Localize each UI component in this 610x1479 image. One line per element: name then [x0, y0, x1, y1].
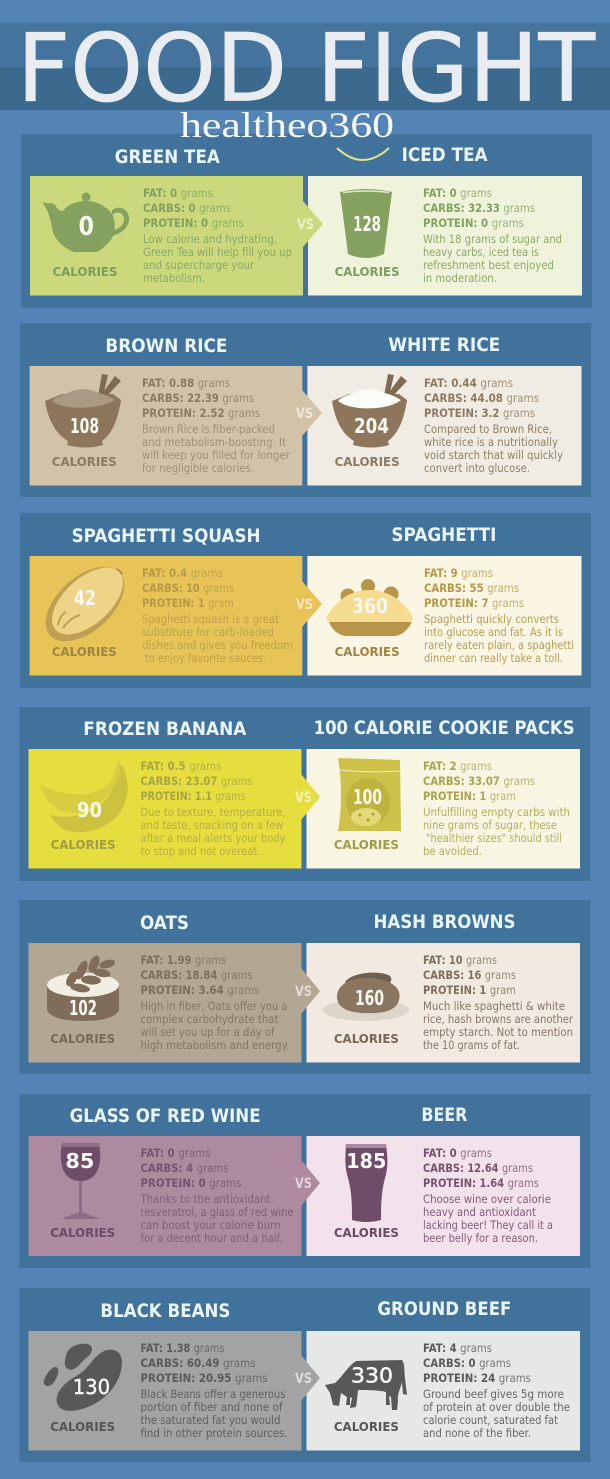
icon: beer glass: [345, 1144, 387, 1222]
calories label: CALORIES: [51, 837, 116, 852]
nutrition stats: FAT: 10 grams: [423, 953, 497, 967]
nutrition stats: PROTEIN: 0 grams: [140, 1176, 241, 1190]
card: oats: [28, 943, 302, 1062]
calories label: CALORIES: [50, 1225, 115, 1240]
description: the saturated fat you would: [140, 1413, 280, 1427]
description: Compared to Brown Rice,: [424, 422, 552, 436]
icon: wine glass: [61, 1143, 100, 1219]
description: metabolism.: [143, 271, 205, 285]
card: brown rice: [30, 366, 302, 486]
vs arrow: VS: [295, 790, 312, 806]
heading: 100 calorie cookie packs: 100 CALORIE COOKIE PACKS: [314, 717, 575, 739]
calories label: CALORIES: [334, 1419, 399, 1434]
nutrition stats: FAT: 0 grams: [143, 186, 213, 200]
description: [142, 422, 290, 475]
vs arrow: [295, 774, 320, 820]
nutrition stats: PROTEIN: 0 grams: [143, 216, 244, 230]
description: [423, 805, 570, 858]
icon: cow: 330: [351, 1364, 393, 1388]
nutrition stats: PROTEIN: 3.2 grams: [424, 406, 535, 420]
description: refreshment best enjoyed: [423, 258, 554, 272]
description: Green Tea will help fill you up: [143, 245, 292, 259]
nutrition stats: CARBS: 23.07 grams: [140, 774, 252, 788]
nutrition stats: [423, 1341, 531, 1385]
vs arrow: VS: [295, 1371, 312, 1387]
nutrition stats: CARBS: 55 grams: [424, 581, 519, 595]
nutrition stats: CARBS: 22.39 grams: [142, 391, 254, 405]
description: [140, 999, 290, 1052]
icon: cookie pack: 100: [353, 785, 382, 809]
icon: cup: [340, 189, 392, 258]
nutrition stats: [143, 186, 244, 230]
card: white rice: [307, 366, 582, 486]
description: high metabolism and energy.: [140, 1038, 290, 1052]
description: resveratrol, a glass of red wine: [140, 1205, 294, 1219]
icon: cup: 128: [353, 212, 381, 236]
vs arrow: [295, 968, 320, 1014]
nutrition stats: FAT: 9 grams: [424, 566, 493, 580]
nutrition stats: FAT: 0.5 grams: [140, 759, 222, 773]
description: [424, 612, 574, 665]
description: [140, 1192, 294, 1245]
description: rice, hash browns are another: [423, 1012, 573, 1026]
heading: ground beef: GROUND BEEF: [377, 1298, 511, 1320]
icon: brown rice bowl: 108: [70, 414, 99, 438]
nutrition stats: [423, 953, 516, 997]
nutrition stats: PROTEIN: 1.64 grams: [423, 1176, 539, 1190]
icon: black beans: [44, 1344, 122, 1411]
card: spaghetti squash: [30, 552, 302, 676]
nutrition stats: CARBS: 60.49 grams: [140, 1356, 256, 1370]
description: of protein at over double the: [423, 1400, 570, 1414]
vs arrow: [296, 581, 322, 627]
card: cookie packs: [306, 749, 580, 868]
nutrition stats: [423, 1146, 539, 1190]
nutrition stats: PROTEIN: 1 gram: [423, 789, 516, 803]
calories label: CALORIES: [335, 644, 400, 659]
nutrition stats: FAT: 0.88 grams: [142, 376, 230, 390]
icon: white rice bowl: 204: [354, 414, 389, 438]
nutrition stats: CARBS: 10 grams: [142, 581, 234, 595]
icon: hash browns: 160: [355, 986, 384, 1010]
description: [423, 1387, 570, 1440]
vs arrow: [295, 1355, 320, 1401]
nutrition stats: FAT: 0 grams: [423, 186, 492, 200]
description: Much like spaghetti & white: [423, 999, 565, 1013]
description: Due to texture, temperature,: [140, 805, 286, 819]
calories label: CALORIES: [334, 1225, 399, 1240]
calories label: CALORIES: [335, 264, 400, 279]
icon: squash: [32, 552, 138, 656]
nutrition stats: CARBS: 32.33 grams: [423, 201, 535, 215]
nutrition stats: PROTEIN: 3.64 grams: [140, 983, 260, 997]
calories label: CALORIES: [50, 1031, 115, 1046]
nutrition stats: FAT: 1.38 grams: [140, 1341, 224, 1355]
description: find in other protein sources.: [140, 1426, 288, 1440]
nutrition stats: FAT: 4 grams: [423, 1341, 492, 1355]
vs arrow: VS: [295, 984, 312, 1000]
icon: black beans: 130: [73, 1375, 110, 1399]
nutrition stats: [142, 376, 260, 420]
panel: black beans vs ground beef: [20, 1288, 590, 1462]
icon: cookie pack: [338, 758, 401, 831]
description: the 10 grams of fat.: [423, 1038, 520, 1052]
heading: green tea: GREEN TEA: [115, 146, 220, 168]
description: empty starch. Not to mention: [423, 1025, 573, 1039]
description: calorie count, saturated fat: [423, 1413, 558, 1427]
nutrition stats: PROTEIN: 20.95 grams: [140, 1371, 268, 1385]
vs arrow: [297, 201, 323, 247]
card: spaghetti: [307, 556, 582, 676]
calories label: CALORIES: [50, 1419, 115, 1434]
card: iced tea: [308, 176, 582, 296]
calories label: CALORIES: [52, 644, 117, 659]
heading: spaghetti: SPAGHETTI: [391, 524, 496, 546]
icon: banana: [40, 757, 128, 832]
panel: spaghetti squash vs spaghetti: [20, 513, 591, 688]
heading: glass of red wine: GLASS OF RED WINE: [70, 1105, 261, 1127]
nutrition stats: [140, 953, 260, 997]
description: to stop and not overeat.: [140, 844, 260, 858]
description: [423, 999, 573, 1052]
calories label: CALORIES: [334, 837, 399, 852]
description: [140, 1387, 288, 1440]
description: in moderation.: [423, 271, 497, 285]
panel: frozen banana vs cookie packs: [20, 707, 590, 881]
icon: cow: [325, 1360, 407, 1410]
heading: hash browns: HASH BROWNS: [374, 911, 516, 933]
description: [424, 422, 563, 475]
nutrition stats: [142, 566, 234, 610]
description: [143, 232, 292, 285]
nutrition stats: CARBS: 33.07 grams: [423, 774, 535, 788]
description: [140, 805, 286, 858]
panel: red wine vs beer: [20, 1094, 590, 1268]
nutrition stats: [140, 1146, 241, 1190]
nutrition stats: FAT: 2 grams: [423, 759, 492, 773]
card: hash browns: [306, 943, 580, 1062]
heading: frozen banana: FROZEN BANANA: [83, 718, 247, 740]
heading: oats: OATS: [140, 912, 189, 934]
description: for negligible calories.: [142, 461, 254, 475]
description: dishes and gives you freedom: [142, 638, 293, 652]
heading: iced tea: ICED TEA: [402, 144, 488, 166]
vs arrow: VS: [296, 597, 313, 613]
description: and none of the fiber.: [423, 1426, 531, 1440]
nutrition stats: [140, 1341, 268, 1385]
nutrition stats: [423, 759, 535, 803]
description: will set you up for a day of: [140, 1025, 275, 1039]
nutrition stats: FAT: 0 grams: [423, 1146, 492, 1160]
description: and metabolism-boosting. It: [142, 435, 286, 449]
description: heavy and antioxidant: [423, 1205, 536, 1219]
icon: white rice bowl: [332, 374, 407, 448]
description: "healthier sizes" should still: [426, 831, 562, 845]
heading: brown rice: BROWN RICE: [105, 335, 227, 357]
description: substitute for carb-loaded: [142, 625, 274, 639]
logo: healtheo360: [180, 105, 394, 160]
description: can boost your calorie burn: [140, 1218, 280, 1232]
nutrition stats: CARBS: 12.64 grams: [423, 1161, 533, 1175]
card: ground beef: [306, 1331, 580, 1450]
description: Thanks to the antioxidant: [140, 1192, 271, 1206]
icon: brown rice bowl: [45, 374, 121, 448]
nutrition stats: PROTEIN: 2.52 grams: [142, 406, 260, 420]
calories label: CALORIES: [334, 1031, 399, 1046]
description: for a decent hour and a half.: [140, 1231, 282, 1245]
description: High in fiber, Oats offer you a: [140, 999, 288, 1013]
icon: teapot: [42, 192, 129, 252]
description: Unfulfilling empty carbs with: [423, 805, 570, 819]
nutrition stats: PROTEIN: 24 grams: [423, 1371, 531, 1385]
nutrition stats: FAT: 0.4 grams: [142, 566, 223, 580]
icon: teapot: 0: [78, 212, 94, 242]
nutrition stats: [423, 186, 535, 230]
description: beer belly for a reason.: [423, 1231, 538, 1245]
icon: banana: 90: [77, 798, 102, 822]
description: Spaghetti squash is a great: [142, 612, 279, 626]
icon: oats can: [47, 954, 119, 1021]
description: Spaghetti quickly converts: [424, 612, 559, 626]
description: With 18 grams of sugar and: [423, 232, 562, 246]
vs arrow: VS: [297, 217, 314, 233]
icon: hash browns: [323, 973, 409, 1021]
panel: oats vs hash browns: [20, 900, 590, 1074]
heading: white rice: WHITE RICE: [388, 334, 500, 356]
description: [423, 1192, 553, 1245]
description: portion of fiber and none of: [140, 1400, 283, 1414]
vs arrow: VS: [295, 1176, 312, 1192]
description: white rice is a nutritionally: [424, 435, 558, 449]
logo: healtheo360: healtheo360: [180, 105, 394, 145]
description: nine grams of sugar, these: [423, 818, 557, 832]
nutrition stats: CARBS: 0 grams: [423, 1356, 511, 1370]
description: convert into glucose.: [424, 461, 530, 475]
nutrition stats: CARBS: 18.84 grams: [140, 968, 252, 982]
nutrition stats: CARBS: 0 grams: [143, 201, 231, 215]
description: Black Beans offer a generous: [140, 1387, 286, 1401]
description: be avoided.: [423, 844, 482, 858]
title banner: FOOD FIGHT: [17, 14, 596, 124]
description: heavy carbs, iced tea is: [423, 245, 539, 259]
description: lacking beer! They call it a: [423, 1218, 553, 1232]
nutrition stats: [424, 566, 524, 610]
nutrition stats: CARBS: 4 grams: [140, 1161, 228, 1175]
description: and taste, snacking on a few: [140, 818, 284, 832]
calories label: CALORIES: [52, 264, 118, 279]
heading: spaghetti squash: SPAGHETTI SQUASH: [72, 525, 261, 547]
description: rarely eaten plain, a spaghetti: [424, 638, 574, 652]
description: will keep you filled for longer: [142, 448, 290, 462]
card: black beans: [28, 1331, 302, 1450]
card: green tea: [30, 176, 303, 296]
heading: black beans: BLACK BEANS: [100, 1300, 230, 1322]
panel: green tea vs iced tea: [21, 134, 592, 308]
description: Ground beef gives 5g more: [423, 1387, 564, 1401]
description: into glucose and fat. As it is: [424, 625, 563, 639]
nutrition stats: CARBS: 16 grams: [423, 968, 516, 982]
nutrition stats: PROTEIN: 0 grams: [423, 216, 524, 230]
description: [423, 232, 562, 285]
description: Choose wine over calorie: [423, 1192, 551, 1206]
nutrition stats: [140, 759, 252, 803]
heading: beer: BEER: [421, 1104, 468, 1126]
description: void starch that will quickly: [424, 448, 563, 462]
vs arrow: VS: [296, 406, 313, 422]
nutrition stats: PROTEIN: 7 grams: [424, 596, 524, 610]
vs arrow: [296, 390, 322, 436]
nutrition stats: FAT: 0 grams: [140, 1146, 210, 1160]
vs arrow: [295, 1160, 320, 1206]
nutrition stats: PROTEIN: 1 gram: [142, 596, 234, 610]
icon: beer glass: 185: [346, 1149, 386, 1173]
description: [142, 612, 293, 665]
description: Low calorie and hydrating,: [143, 232, 277, 246]
nutrition stats: PROTEIN: 1.1 grams: [140, 789, 245, 803]
nutrition stats: CARBS: 44.08 grams: [424, 391, 539, 405]
card: beer: [306, 1136, 580, 1256]
icon: oats can: 102: [69, 996, 97, 1020]
calories label: CALORIES: [335, 454, 400, 469]
nutrition stats: FAT: 1.99 grams: [140, 953, 226, 967]
description: and supercharge your: [143, 258, 254, 272]
description: to enjoy favorite sauces.: [145, 651, 266, 665]
description: after a meal alerts your body: [140, 831, 286, 845]
icon: spaghetti plate: 360: [352, 594, 388, 618]
calories label: CALORIES: [52, 454, 117, 469]
card: frozen banana: [28, 749, 302, 868]
nutrition stats: FAT: 0.44 grams: [424, 376, 513, 390]
nutrition stats: PROTEIN: 1 gram: [423, 983, 516, 997]
icon: spaghetti plate: [326, 579, 413, 636]
icon: squash: 42: [74, 586, 96, 610]
description: complex carbohydrate that: [140, 1012, 279, 1026]
nutrition stats: [424, 376, 539, 420]
icon: wine glass: 85: [65, 1149, 94, 1173]
description: Brown Rice is fiber-packed: [142, 422, 275, 436]
panel: brown rice vs white rice: [20, 323, 591, 497]
card: red wine: [28, 1136, 302, 1256]
description: dinner can really take a toll.: [424, 651, 563, 665]
